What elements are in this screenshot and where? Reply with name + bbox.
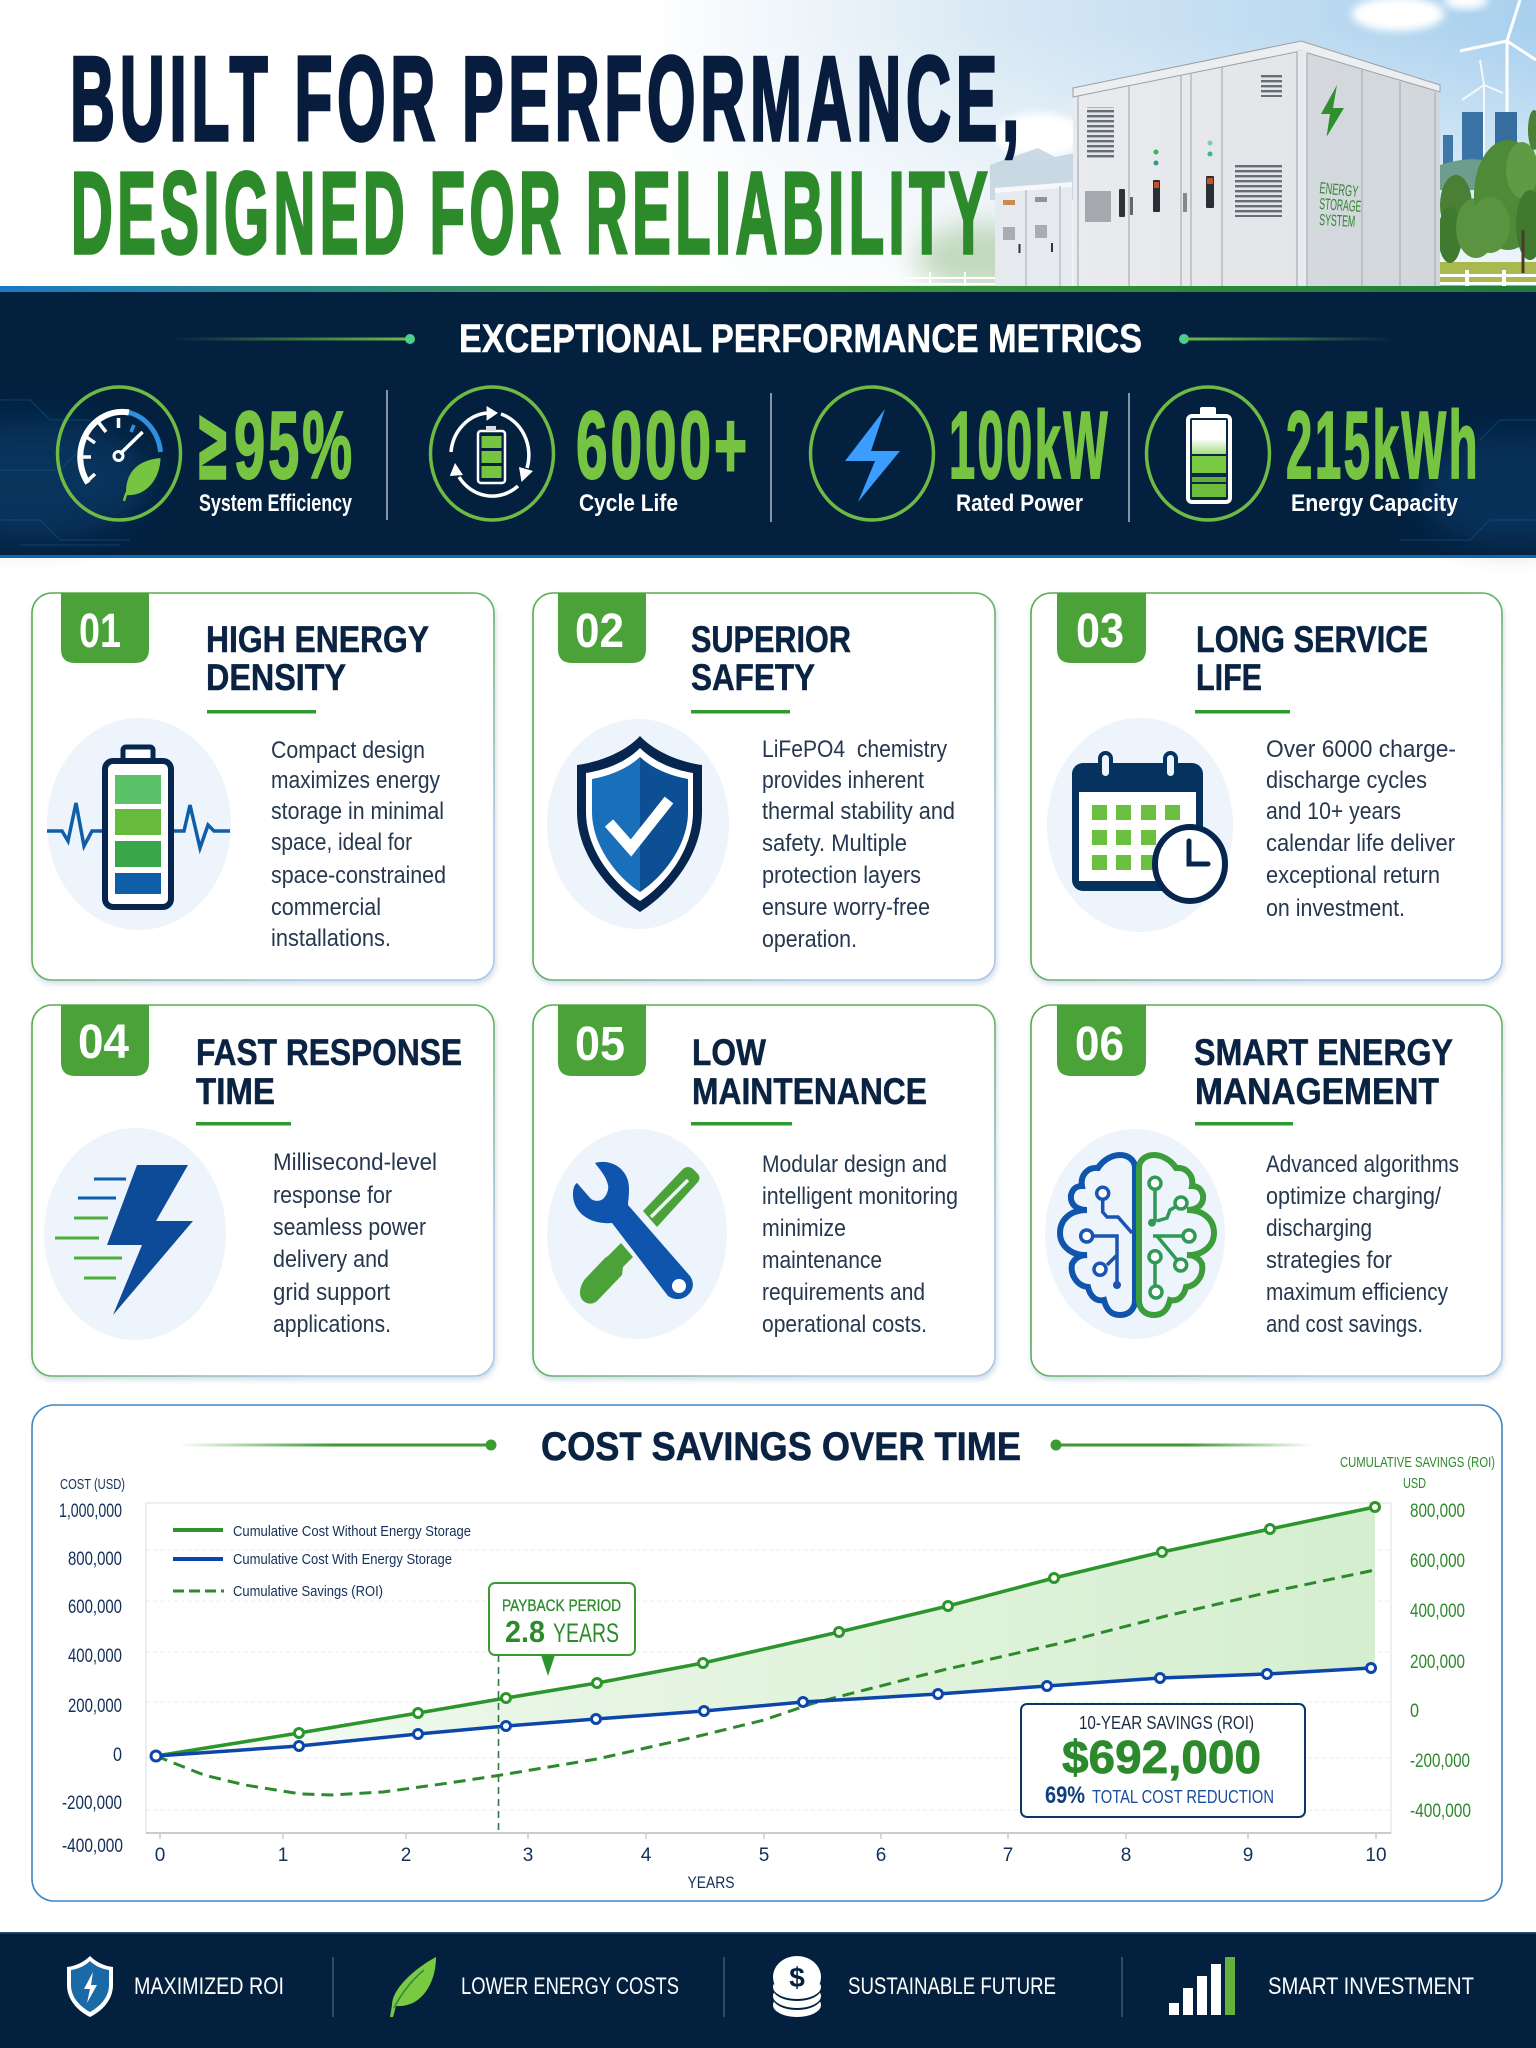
- callout: payback period: 2.8: [505, 1614, 545, 1649]
- right axis labels: USD: [1403, 1475, 1426, 1492]
- icon: leaf: [390, 1957, 436, 2017]
- left axis labels: -200,000: [62, 1793, 122, 1814]
- badge 04: 04: [78, 1016, 129, 1069]
- large storage cabinet: [1073, 41, 1440, 287]
- left axis labels: -400,000: [62, 1836, 123, 1857]
- cabinet side text: [1319, 180, 1362, 231]
- body text: maximizes energy: [271, 767, 440, 794]
- badge 01: 01: [79, 605, 121, 658]
- heading: MANAGEMENT: [1195, 1071, 1439, 1112]
- badge 06: [1057, 1005, 1146, 1076]
- body text: discharging: [1266, 1215, 1372, 1242]
- title: [70, 32, 1024, 278]
- metric: energy capacity: Energy Capacity: [1291, 490, 1459, 517]
- left axis labels: [59, 1476, 125, 1857]
- callout: payback period: PAYBACK PERIOD: [502, 1596, 621, 1615]
- label: lower energy costs: LOWER ENERGY COSTS: [461, 1973, 679, 2000]
- heading: [1194, 1032, 1453, 1126]
- body text: LiFePO4 chemistry: [762, 736, 947, 763]
- savings area between lines: [156, 1507, 1375, 1756]
- left axis labels: COST (USD): [60, 1476, 125, 1493]
- body text: installations.: [271, 925, 391, 952]
- body text: minimize: [762, 1215, 846, 1242]
- badge 03: [1057, 593, 1146, 663]
- footer bar: [0, 1932, 1536, 2048]
- legend: Cumulative Cost With Energy Storage: [233, 1551, 452, 1568]
- heading: DENSITY: [206, 657, 346, 698]
- right axis labels: -400,000: [1410, 1801, 1471, 1822]
- body text: operational costs.: [762, 1311, 927, 1338]
- body text: [1266, 736, 1456, 922]
- header banner with title and product photo: [0, 0, 1536, 292]
- body text: Compact design: [271, 737, 425, 764]
- line: cost with storage: [151, 1664, 1376, 1761]
- body text: [273, 1149, 437, 1338]
- x axis labels: 3: [523, 1845, 533, 1866]
- body text: maintenance: [762, 1247, 882, 1274]
- body text: applications.: [273, 1311, 391, 1338]
- badge 04: [61, 1005, 149, 1076]
- callout: 10-year savings: $692,000: [1062, 1731, 1261, 1783]
- scenery: clouds, mountains, city, wind turbines and trees: [905, 0, 1536, 292]
- cabinet side text: SYSTEM: [1319, 212, 1356, 231]
- body text: Advanced algorithms: [1266, 1151, 1459, 1178]
- cabinet side text: ENERGY: [1319, 180, 1359, 201]
- panel: performance metrics: 100kW: [949, 392, 1110, 499]
- callout: 10-year savings: TOTAL COST REDUCTION: [1092, 1786, 1274, 1807]
- callout: payback period: YEARS: [553, 1618, 619, 1648]
- body text: [762, 1151, 958, 1338]
- body text: ensure worry-free: [762, 894, 930, 921]
- metric: rated power: Rated Power: [956, 490, 1083, 517]
- left axis labels: 800,000: [68, 1549, 122, 1570]
- heading: [206, 619, 429, 714]
- left axis labels: 0: [113, 1745, 122, 1766]
- metric: cycle life: Cycle Life: [579, 490, 678, 517]
- body text: delivery and: [273, 1246, 389, 1273]
- x axis labels: YEARS: [688, 1873, 734, 1892]
- body text: commercial: [271, 894, 381, 921]
- heading: [196, 1032, 462, 1126]
- icon: gauge with leaf: [80, 412, 160, 501]
- heading: [691, 619, 851, 714]
- heading: TIME: [196, 1071, 275, 1112]
- badge 02: [558, 593, 646, 663]
- metric: system efficiency: 95%: [234, 392, 355, 499]
- right axis labels: 200,000: [1410, 1652, 1465, 1673]
- callout: 10-year savings: 10-YEAR SAVINGS (ROI): [1079, 1713, 1254, 1733]
- legend: Cumulative Savings (ROI): [233, 1583, 383, 1600]
- plot grid and frame: [146, 1503, 1391, 1839]
- heading: MAINTENANCE: [692, 1071, 927, 1112]
- panel: card 03 long service life: [1031, 593, 1502, 980]
- icon: battery level: [1186, 407, 1232, 504]
- body text: response for: [273, 1182, 392, 1209]
- heading: exceptional performance metrics: EXCEPTIONAL PERFORMANCE METRICS: [459, 317, 1142, 361]
- panel: cost savings chart: [32, 1405, 1502, 1901]
- body text: discharge cycles: [1266, 767, 1427, 794]
- x axis labels: 9: [1243, 1845, 1253, 1866]
- label: sustainable future: SUSTAINABLE FUTURE: [848, 1973, 1056, 2000]
- heading: [1195, 619, 1428, 714]
- metric: rated power: [810, 387, 1110, 520]
- body text: provides inherent: [762, 767, 924, 794]
- x axis labels: 8: [1121, 1845, 1131, 1866]
- icon: coin stack: [773, 1956, 821, 2017]
- heading: LONG SERVICE: [1196, 619, 1428, 660]
- chart heading: [178, 1425, 1314, 1469]
- icon: battery with cycle arrows: [450, 406, 533, 496]
- x axis labels: 6: [876, 1845, 886, 1866]
- label: maximized roi: MAXIMIZED ROI: [134, 1973, 284, 2000]
- right axis labels: 600,000: [1410, 1551, 1465, 1572]
- left axis labels: 200,000: [68, 1696, 122, 1717]
- right axis labels: 400,000: [1410, 1601, 1465, 1622]
- heading: exceptional performance metrics: [172, 317, 1392, 361]
- x axis labels: 4: [641, 1845, 652, 1866]
- metric: system efficiency: System Efficiency: [199, 490, 352, 517]
- metric: cycle life: 6000+: [576, 392, 750, 499]
- icon: speeding lightning bolt: [44, 1128, 226, 1340]
- body text: [271, 737, 446, 952]
- icon: wrench and screwdriver: [547, 1129, 727, 1339]
- callout: payback period: [489, 1583, 635, 1832]
- badge 02: 02: [575, 605, 624, 658]
- cabinet side text: STORAGE: [1319, 196, 1362, 216]
- body text: safety. Multiple: [762, 830, 907, 857]
- body text: Millisecond-level: [273, 1149, 437, 1176]
- heading: LIFE: [1196, 657, 1262, 698]
- body text: storage in minimal: [271, 798, 444, 825]
- callout: 10-year savings: 69%: [1045, 1782, 1085, 1809]
- body text: intelligent monitoring: [762, 1183, 958, 1210]
- heading: SAFETY: [691, 657, 815, 698]
- body text: and 10+ years: [1266, 798, 1401, 825]
- metric: energy capacity: [1146, 387, 1480, 520]
- icon: growth bars: [1169, 1957, 1235, 2015]
- body text: maximum efficiency: [1266, 1279, 1448, 1306]
- dashed savings line: [156, 1570, 1375, 1795]
- body text: Modular design and: [762, 1151, 947, 1178]
- body text: protection layers: [762, 862, 921, 889]
- badge 01: [61, 593, 149, 663]
- body text: thermal stability and: [762, 798, 955, 825]
- x axis labels: 1: [278, 1845, 288, 1866]
- heading: HIGH ENERGY: [206, 619, 429, 660]
- heading: SUPERIOR: [691, 619, 851, 660]
- badge 03: 03: [1076, 605, 1124, 658]
- left axis labels: 600,000: [68, 1597, 122, 1618]
- x axis labels: 7: [1003, 1845, 1013, 1866]
- x axis labels: 0: [155, 1845, 165, 1866]
- line: cost without storage: [156, 1502, 1380, 1756]
- small storage cabinet: [995, 182, 1072, 286]
- body text: on investment.: [1266, 895, 1405, 922]
- right axis labels: -200,000: [1410, 1751, 1470, 1772]
- heading: SMART ENERGY: [1194, 1032, 1453, 1073]
- chart heading: COST SAVINGS OVER TIME: [541, 1425, 1021, 1469]
- icon: coin stack: $: [789, 1962, 805, 1993]
- body text: space-constrained: [271, 862, 446, 889]
- heading: FAST RESPONSE: [196, 1032, 462, 1073]
- panel: card 02 superior safety: [533, 593, 995, 980]
- x axis labels: 2: [401, 1845, 411, 1866]
- legend: [173, 1523, 471, 1600]
- x axis labels: 5: [759, 1845, 769, 1866]
- x axis labels: [155, 1845, 1387, 1892]
- body text: [762, 736, 955, 953]
- body text: operation.: [762, 926, 857, 953]
- legend: Cumulative Cost Without Energy Storage: [233, 1523, 471, 1540]
- panel: card 05 low maintenance: [533, 1005, 995, 1376]
- icon: lightning bolt: [845, 409, 900, 502]
- panel: card 06 smart energy management: [1031, 1005, 1502, 1376]
- callout: 10-year savings: [1021, 1704, 1305, 1817]
- heading: LOW: [692, 1032, 766, 1073]
- green bolt logo on cabinet side: [1321, 85, 1344, 137]
- metric: system efficiency: ≥: [199, 392, 229, 499]
- x axis labels: 10: [1365, 1845, 1387, 1866]
- badge 05: [558, 1005, 646, 1076]
- body text: exceptional return: [1266, 862, 1440, 889]
- body text: seamless power: [273, 1214, 426, 1241]
- icon: shield with check: [547, 719, 729, 929]
- right axis labels: [1340, 1454, 1495, 1822]
- left axis labels: 400,000: [68, 1646, 122, 1667]
- body text: Over 6000 charge-: [1266, 736, 1456, 763]
- badge 06: 06: [1075, 1018, 1124, 1071]
- right axis labels: 800,000: [1410, 1501, 1465, 1522]
- metric: system efficiency: [58, 387, 355, 520]
- body text: requirements and: [762, 1279, 925, 1306]
- icon: shield: [67, 1956, 113, 2017]
- metric: cycle life: [430, 387, 750, 520]
- body text: and cost savings.: [1266, 1311, 1423, 1338]
- icon: battery with pulse: [47, 718, 231, 930]
- body text: strategies for: [1266, 1247, 1392, 1274]
- right axis labels: 0: [1410, 1701, 1419, 1722]
- icon: calendar with clock: [1047, 718, 1233, 932]
- panel: card 01 high energy density: [32, 593, 494, 980]
- body text: calendar life deliver: [1266, 830, 1455, 857]
- heading: [691, 1032, 927, 1126]
- body text: space, ideal for: [271, 829, 412, 856]
- left axis labels: 1,000,000: [59, 1501, 122, 1522]
- label: smart investment: SMART INVESTMENT: [1268, 1973, 1474, 2000]
- body text: [1266, 1151, 1459, 1338]
- panel: performance metrics: [0, 286, 1536, 558]
- panel: card 04 fast response time: [32, 1005, 494, 1376]
- body text: optimize charging/: [1266, 1183, 1441, 1210]
- badge 05: 05: [575, 1018, 625, 1071]
- icon: brain circuit: [1045, 1129, 1225, 1339]
- body text: grid support: [273, 1279, 390, 1306]
